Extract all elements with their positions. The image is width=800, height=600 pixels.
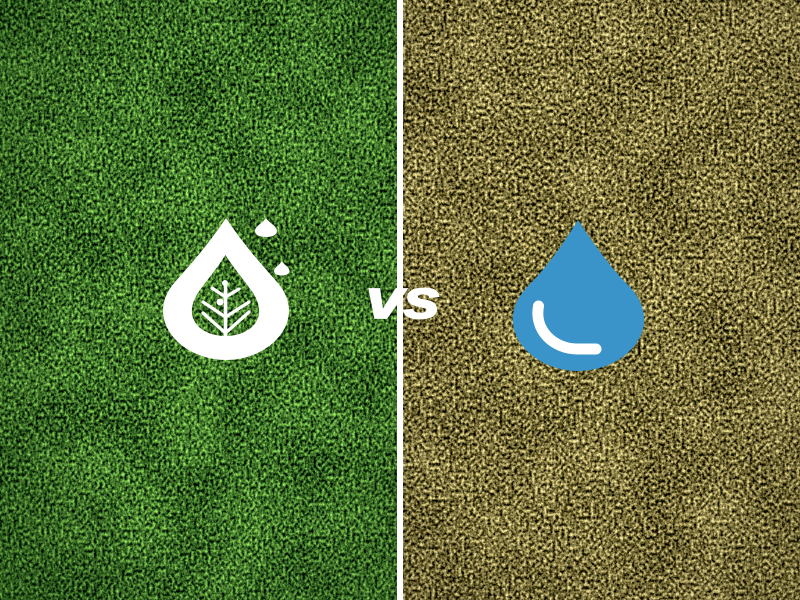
icon: upper small droplet (255, 218, 277, 237)
panel: green lawn (0, 0, 397, 600)
label: vs: vs (366, 268, 441, 330)
icon: leaf veins (203, 280, 249, 335)
icon: blue water drop (513, 220, 644, 371)
icon: lower small droplet (274, 261, 290, 276)
icon: drop highlight (538, 306, 596, 349)
icon: white water drop with leaf (163, 218, 290, 360)
panel: dry lawn (403, 0, 800, 600)
divider line (397, 0, 403, 600)
